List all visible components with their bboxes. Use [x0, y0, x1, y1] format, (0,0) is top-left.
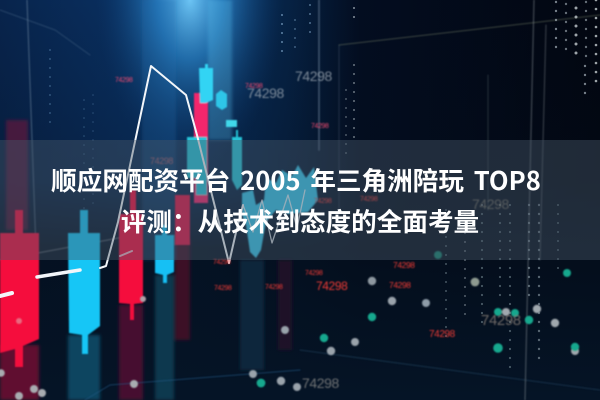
cyan candle small — [155, 225, 174, 283]
grey 74298 labels: 74298 — [247, 85, 285, 101]
faint vertical columns — [0, 0, 292, 400]
grey 74298 labels: 74298 — [481, 312, 521, 329]
scattered grey and teal dots — [0, 251, 579, 400]
grey 74298 labels: 74298 — [150, 156, 173, 166]
red 74298 labels: 74298 — [214, 285, 232, 292]
red 74298 labels: 74298 — [305, 270, 323, 277]
red 74298 labels: 74298 — [213, 259, 231, 266]
grey 74298 labels — [150, 68, 521, 391]
red 74298 labels: 74298 — [314, 198, 332, 205]
red candle left — [0, 210, 39, 367]
cyan candle — [68, 210, 100, 354]
red 74298 labels — [115, 77, 456, 340]
red candle middle — [119, 190, 143, 320]
cyan hexagon candle — [216, 90, 227, 110]
translucent title band — [0, 140, 600, 260]
red 74298 labels: 74298 — [265, 284, 283, 291]
red 74298 labels: 74298 — [311, 123, 329, 130]
cyan candle top — [199, 64, 213, 103]
red 74298 labels: 74298 — [245, 83, 263, 90]
teal jagged cluster — [242, 165, 318, 258]
grey 74298 labels: 74298 — [295, 68, 333, 84]
dark red candle — [175, 195, 190, 245]
small cyan candle — [226, 120, 237, 127]
white price line — [0, 66, 305, 296]
title: 评测：从技术到态度的全面考量 — [121, 202, 479, 239]
red 74298 labels: 74298 — [115, 77, 133, 84]
red 74298 labels: 74298 — [389, 280, 411, 290]
candlesticks — [0, 64, 318, 367]
red 74298 labels: 74298 — [429, 329, 456, 340]
title — [51, 161, 541, 239]
teal candle pair — [187, 137, 207, 195]
red 74298 labels: 74298 — [316, 279, 348, 293]
red 74298 labels: 74298 — [360, 196, 378, 203]
grey 74298 labels: 74298 — [302, 375, 340, 391]
red 74298 labels: 74298 — [393, 260, 415, 270]
grey 74298 labels: 74298 — [472, 196, 510, 212]
title: 顺应网配资平台 2005 年三角洲陪玩 TOP8 — [51, 161, 541, 198]
pink candle — [194, 93, 208, 203]
